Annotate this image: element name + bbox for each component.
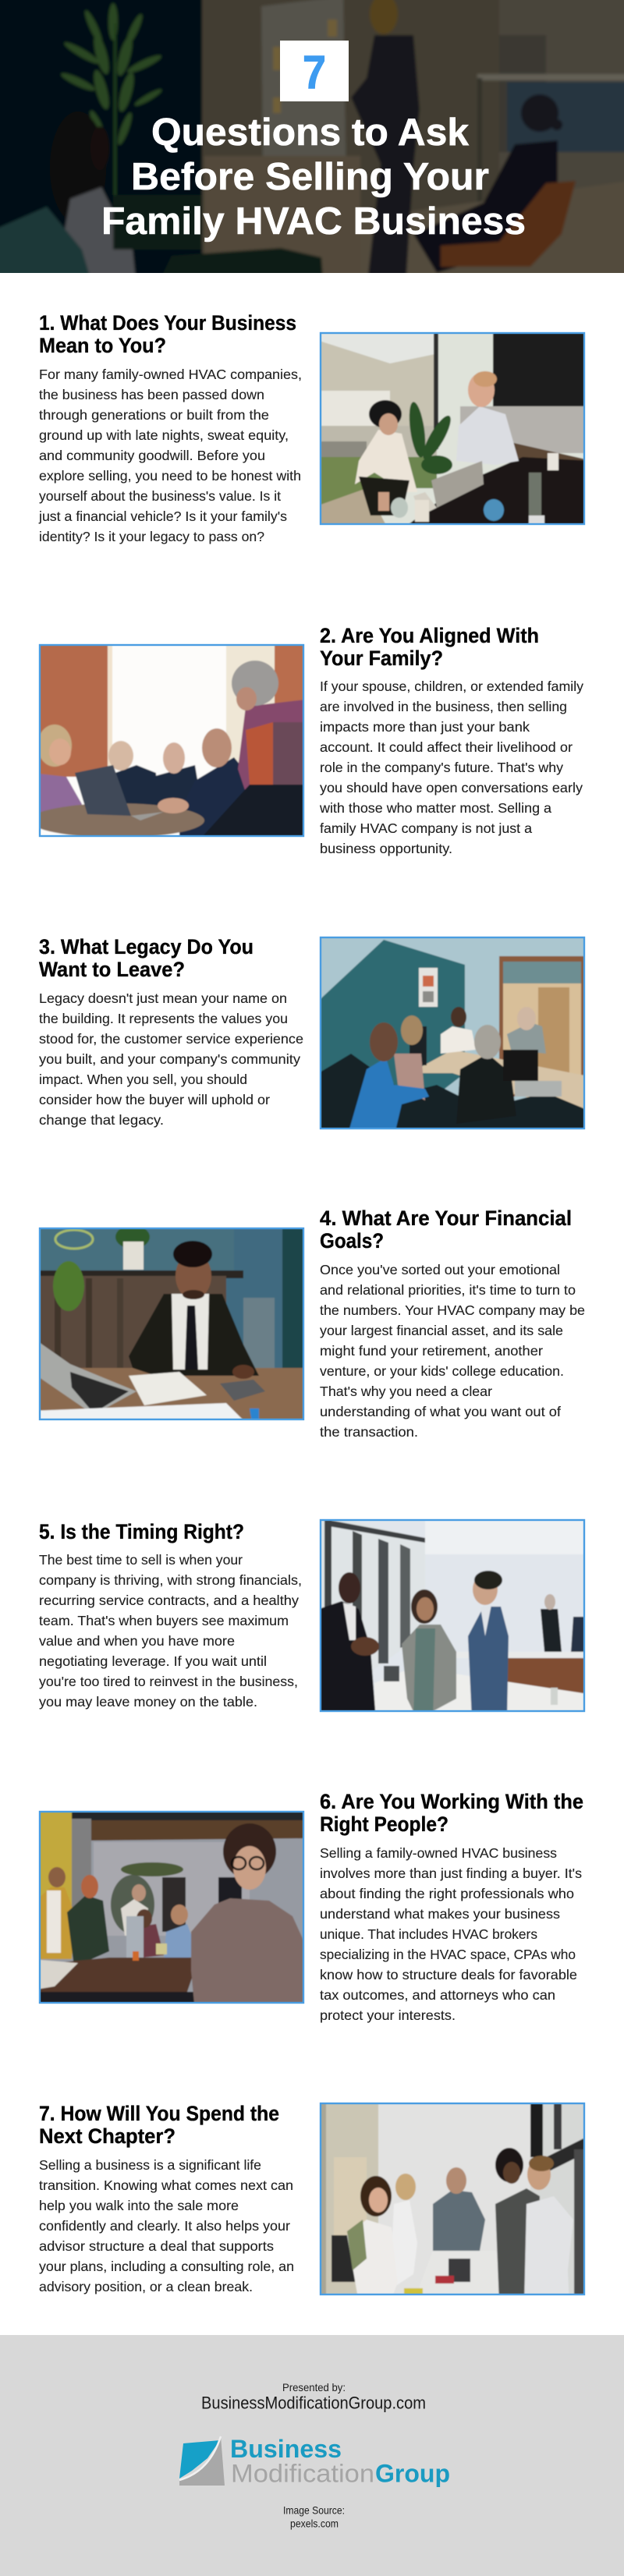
left man xyxy=(312,1601,376,1720)
standing presenter xyxy=(351,35,420,289)
body text 7: help you walk into the sale more xyxy=(39,2198,239,2213)
panel: question 5 xyxy=(39,1511,593,1720)
number badge: 7 xyxy=(303,46,326,98)
body text 4: understanding of what you want out of xyxy=(320,1404,561,1419)
body text 7: your plans, including a consulting role, an xyxy=(39,2259,294,2274)
body text 3: Legacy doesn't just mean your name on xyxy=(39,990,287,1006)
source site: pexels.com xyxy=(290,2518,339,2530)
body text 2: with those who matter most. Selling a xyxy=(319,800,551,816)
body text 3: the building. It represents the values you xyxy=(39,1011,288,1026)
logo wordmark: Modification xyxy=(231,2460,374,2488)
body text 6: protect your interests. xyxy=(320,2007,456,2023)
woman xyxy=(355,430,417,492)
body text 7: Selling a business is a significant life xyxy=(39,2157,261,2173)
body text 5: company is thriving, with strong financials, xyxy=(39,1572,302,1588)
black man xyxy=(495,2188,540,2303)
standing woman xyxy=(237,700,303,791)
presented by: Presented by: xyxy=(282,2381,346,2394)
footer xyxy=(0,2335,624,2576)
body text 2: family HVAC company is not just a xyxy=(320,820,532,836)
body text 1: identity? Is it your legacy to pass on? xyxy=(39,529,264,544)
bottom dark xyxy=(321,1053,583,1128)
image source: Image Source: xyxy=(283,2503,345,2516)
body text 5: recurring service contracts, and a healthy xyxy=(39,1593,299,1608)
body text 4: Once you've sorted out your emotional xyxy=(320,1262,560,1277)
plant xyxy=(406,401,456,474)
body text 3: stood for, the customer service experience xyxy=(39,1031,303,1047)
far table and desk xyxy=(507,1653,593,1699)
body text 2: account. It could affect their livelihood or xyxy=(320,739,573,755)
man three xyxy=(154,764,198,806)
body text 5: The best time to sell is when your xyxy=(39,1552,243,1568)
body text 4: your largest financial asset, and its sale xyxy=(320,1323,563,1338)
far man xyxy=(507,1022,546,1054)
front woman right xyxy=(456,1054,516,1124)
heading 3 xyxy=(39,935,254,981)
body text 4: That's why you need a clear xyxy=(320,1384,492,1399)
heading 4 xyxy=(320,1207,572,1253)
body text 4: the transaction. xyxy=(320,1424,418,1440)
body text 2: you should have open conversations early xyxy=(320,780,583,795)
heading 1: Mean to You? xyxy=(39,334,166,357)
heading 6 xyxy=(320,1790,583,1836)
table xyxy=(421,1051,583,1109)
body text 3: impact. When you sell, you should xyxy=(39,1072,247,1087)
table xyxy=(413,2251,511,2303)
woman in pink xyxy=(394,1054,425,1100)
title: Questions to Ask xyxy=(151,112,470,154)
body text 1: the business has been passed down xyxy=(39,387,264,402)
heading 3: 3. What Legacy Do You xyxy=(39,935,254,958)
body text 1: yourself about the business's value. Is it xyxy=(39,488,281,504)
woman xyxy=(191,1898,312,2011)
laptop xyxy=(431,461,484,508)
body text 5: team. That's when buyers see maximum xyxy=(39,1613,289,1628)
laptop xyxy=(31,1337,136,1415)
panel: question 6 xyxy=(31,1790,583,2023)
body text 2: If your spouse, children, or extended family xyxy=(320,679,583,694)
number badge xyxy=(280,41,349,101)
body text 6: unique. That includes HVAC brokers xyxy=(320,1926,537,1942)
photo 4: man with calculator xyxy=(39,1228,304,1421)
blonde woman xyxy=(390,2200,417,2290)
logo wordmark: Business xyxy=(230,2435,342,2463)
body text 5: value and when you have more xyxy=(39,1633,235,1649)
body text 6: tax outcomes, and attorneys who can xyxy=(320,1987,555,2003)
chair left xyxy=(332,2235,355,2282)
body text 1: explore selling, you need to be honest with xyxy=(39,468,301,484)
body text 5: negotiating leverage. If you wait until xyxy=(39,1653,267,1669)
photo 7: team standing around table xyxy=(312,2095,593,2303)
title: Before Selling Your xyxy=(131,156,489,198)
body text 3: consider how the buyer will uphold or xyxy=(39,1092,270,1107)
dark foreground xyxy=(204,784,303,835)
body text 1 xyxy=(38,367,302,544)
logo mark xyxy=(179,2436,225,2486)
man four xyxy=(179,757,246,835)
heading 7: Next Chapter? xyxy=(39,2124,176,2148)
body text 4: the numbers. Your HVAC company may be xyxy=(320,1302,585,1318)
panel: question 4 xyxy=(31,1207,585,1440)
photo 3: boardroom with teal wall xyxy=(320,936,585,1129)
heading 5: 5. Is the Timing Right? xyxy=(39,1520,244,1543)
heading 2: Your Family? xyxy=(320,647,443,670)
body text 2: business opportunity. xyxy=(320,841,452,856)
hand xyxy=(158,798,189,813)
website: BusinessModificationGroup.com xyxy=(201,2393,426,2413)
heading 6: Right People? xyxy=(320,1812,448,1836)
monitor xyxy=(410,1026,427,1065)
papers xyxy=(129,1372,207,1405)
table xyxy=(31,1958,199,1992)
body text 6: about finding the right professionals who xyxy=(320,1886,574,1901)
logo: Business Modification Group xyxy=(179,2435,450,2488)
photo 5: three colleagues talking xyxy=(312,1511,593,1720)
distant person xyxy=(541,1609,562,1652)
header banner xyxy=(0,0,624,289)
heading 3: Want to Leave? xyxy=(39,958,185,981)
body text 4: and relational priorities, it's time to turn to xyxy=(320,1282,576,1298)
body text 5: you're too tired to reinvest in the business, xyxy=(39,1674,298,1689)
blue jacket xyxy=(349,1061,430,1128)
panel: question 3 xyxy=(39,929,593,1137)
heading 4: 4. What Are Your Financial xyxy=(320,1207,572,1230)
man two xyxy=(115,764,158,806)
heading 2 xyxy=(320,624,539,670)
photo 6: woman with team behind xyxy=(31,1803,312,2011)
body text 2: role in the company's future. That's why xyxy=(320,760,563,775)
body text 1: just a financial vehicle? Is it your family's xyxy=(38,508,287,524)
woman front xyxy=(347,2220,398,2303)
panel: question 1 xyxy=(38,311,593,544)
body text 2: are involved in the business, then selling xyxy=(320,699,567,714)
plant in background xyxy=(59,3,163,146)
body text 1: For many family-owned HVAC companies, xyxy=(39,367,302,382)
body text 2 xyxy=(319,679,583,856)
body text 1: and community goodwill. Before you xyxy=(39,448,265,463)
heading 1: 1. What Does Your Business xyxy=(39,311,296,335)
body text 4 xyxy=(320,1262,585,1440)
body text 7: transition. Knowing what comes next can xyxy=(39,2177,293,2193)
title: Family HVAC Business xyxy=(101,200,526,243)
heading 6: 6. Are You Working With the xyxy=(320,1790,583,1813)
bottom paper and folder xyxy=(31,1403,251,1428)
woman left xyxy=(41,774,83,813)
body text 6: understand what makes your business xyxy=(320,1906,560,1922)
body text 7: confidently and clearly. It also helps your xyxy=(39,2218,290,2234)
people left xyxy=(31,1887,74,1959)
logo wordmark: Group xyxy=(375,2460,450,2488)
man right xyxy=(524,2196,573,2303)
glass xyxy=(551,1688,558,1705)
title xyxy=(101,112,526,243)
monitor xyxy=(126,1916,144,1959)
plant and vase xyxy=(53,1261,84,1311)
body text 7: advisory position, or a clean break. xyxy=(39,2279,253,2294)
center woman xyxy=(402,1625,456,1720)
far woman xyxy=(441,1026,476,1054)
middle man xyxy=(433,2190,485,2251)
heading 1 xyxy=(39,311,296,357)
poster xyxy=(419,968,438,1007)
body text 4: venture, or your kids' college education. xyxy=(320,1363,564,1379)
calculator xyxy=(220,1380,265,1401)
heading 7 xyxy=(39,2102,279,2148)
table xyxy=(41,803,205,835)
body text 3: you built, and your company's community xyxy=(39,1051,300,1067)
seated woman left xyxy=(50,112,106,224)
body text 7: advisor structure a deal that supports xyxy=(39,2238,274,2254)
body text 6 xyxy=(320,1845,582,2023)
body text 6: know how to structure deals for favorable xyxy=(320,1967,577,1982)
logo wordmark xyxy=(230,2435,450,2488)
body text 2: impacts more than just your bank xyxy=(320,719,530,735)
body text 6: Selling a family-owned HVAC business xyxy=(320,1845,557,1861)
heading 7: 7. How Will You Spend the xyxy=(39,2102,279,2125)
body text 6: involves more than just finding a buyer. It's xyxy=(320,1866,582,1881)
body text 7 xyxy=(39,2157,294,2294)
man xyxy=(456,406,519,465)
chair xyxy=(243,1298,275,1376)
photo 1: two people at a meeting table xyxy=(320,332,585,526)
seated woman right xyxy=(413,140,558,273)
body text 4: might fund your retirement, another xyxy=(320,1343,543,1359)
body text 1: ground up with late nights, sweat equity, xyxy=(39,427,289,443)
photo 2: family around a laptop xyxy=(39,644,304,838)
body text 1: through generations or built from the xyxy=(39,407,269,423)
chair xyxy=(384,1666,399,1681)
panel: question 7 xyxy=(39,2095,593,2303)
body text 6: specializing in the HVAC space, CPAs who xyxy=(320,1947,576,1962)
panel: question 2 xyxy=(30,624,583,856)
body text 3: change that legacy. xyxy=(39,1112,164,1128)
body text 5: you may leave money on the table. xyxy=(39,1694,257,1710)
table xyxy=(41,1366,303,1419)
laptop xyxy=(75,765,131,816)
man xyxy=(129,1294,259,1376)
body text 3 xyxy=(39,990,303,1128)
body text 5 xyxy=(39,1552,302,1710)
heading 4: Goals? xyxy=(320,1229,384,1253)
cups and vase xyxy=(415,500,429,522)
heading 2: 2. Are You Aligned With xyxy=(320,624,539,647)
right man xyxy=(468,1607,509,1720)
